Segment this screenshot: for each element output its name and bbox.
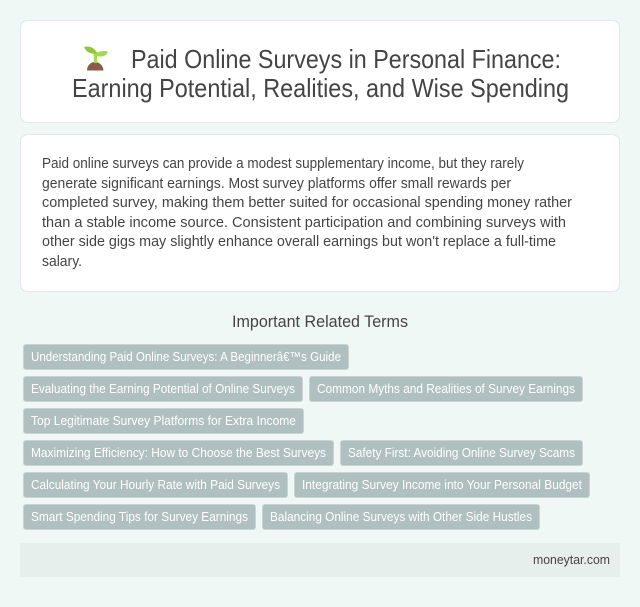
tag 4: Top Legitimate Survey Platforms for Extra Income xyxy=(31,414,296,428)
tag 7: Calculating Your Hourly Rate with Paid Surveys xyxy=(31,478,280,492)
footer bar xyxy=(20,543,620,577)
summary paragraph: Paid online surveys can provide a modest supplementary income, but they rarely xyxy=(42,156,525,172)
tag 2: Evaluating the Earning Potential of Online Surveys xyxy=(31,382,295,396)
tag 1: Understanding Paid Online Surveys: A Beginnerâ€™s Guide xyxy=(31,350,341,364)
tag 3: Common Myths and Realities of Survey Earnings xyxy=(317,382,575,396)
tag 10: Balancing Online Surveys with Other Side Hustles xyxy=(270,510,532,524)
tag 9 xyxy=(24,504,256,530)
summary paragraph: completed survey, making them better suited for occasional spending money rather xyxy=(42,195,572,211)
title text: Earning Potential, Realities, and Wise Spending xyxy=(72,73,569,103)
tag 2 xyxy=(24,376,302,402)
tag 8 xyxy=(294,472,590,498)
tag 6 xyxy=(340,440,582,466)
tag 7 xyxy=(24,472,288,498)
tag 4 xyxy=(24,408,304,434)
summary paragraph: than a stable income source. Consistent participation and combining surveys with xyxy=(42,215,566,231)
heading: important related terms: Important Related Terms xyxy=(232,313,408,331)
title text xyxy=(72,44,569,103)
panel: summary card xyxy=(20,134,620,292)
footer bar: moneytar.com xyxy=(533,552,610,567)
tag 6: Safety First: Avoiding Online Survey Scams xyxy=(348,446,575,460)
tag 5: Maximizing Efficiency: How to Choose the Best Surveys xyxy=(31,446,326,460)
tag 3 xyxy=(310,376,582,402)
summary paragraph: other side gigs may slightly enhance overall earnings but won't replace a full-time xyxy=(42,234,556,250)
tag 1 xyxy=(24,344,348,370)
tag 5 xyxy=(24,440,334,466)
tag 8: Integrating Survey Income into Your Personal Budget xyxy=(302,478,582,492)
tag 10 xyxy=(262,504,540,530)
summary paragraph: salary. xyxy=(42,254,82,270)
summary paragraph xyxy=(42,156,572,270)
title text: Paid Online Surveys in Personal Finance: xyxy=(131,44,561,74)
tag 9: Smart Spending Tips for Survey Earnings xyxy=(31,510,248,524)
icon: seedling xyxy=(84,47,108,70)
panel: title card xyxy=(20,20,620,122)
tag list xyxy=(24,344,590,530)
summary paragraph: generate significant earnings. Most survey platforms offer small rewards per xyxy=(42,176,511,192)
